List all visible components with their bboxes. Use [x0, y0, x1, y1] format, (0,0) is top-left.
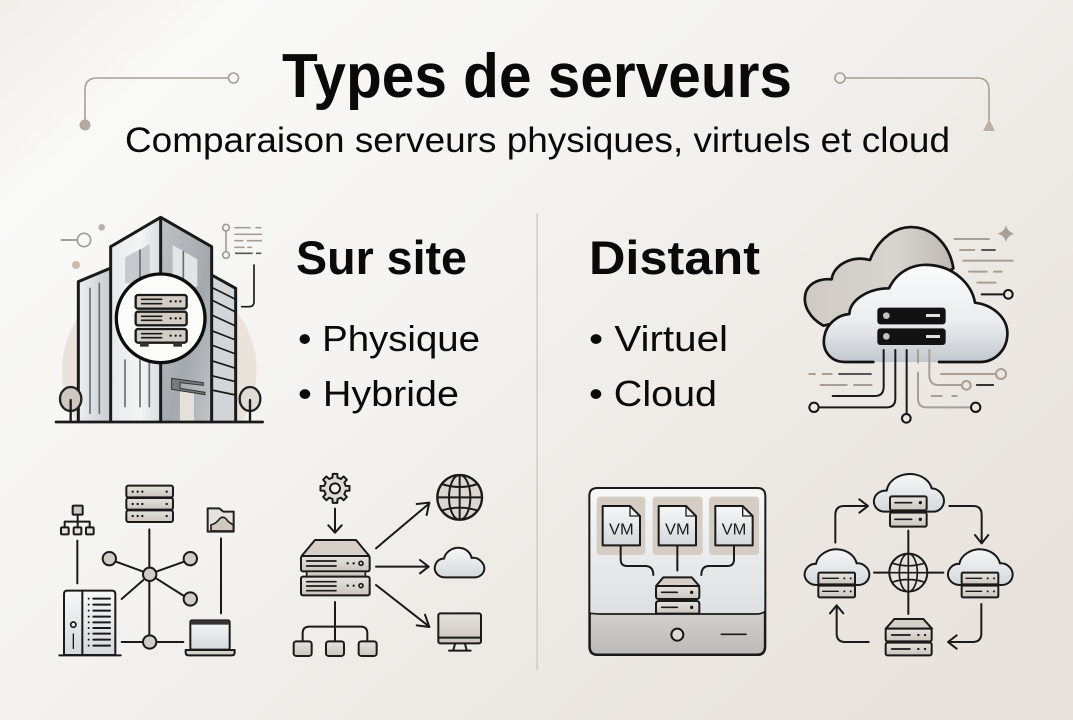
divider [536, 213, 538, 670]
list: Sur site: • Hybride [298, 373, 459, 414]
host server [656, 577, 699, 614]
rack server [126, 486, 173, 522]
server bottom [886, 619, 932, 655]
monitor [438, 613, 481, 651]
VM file 2 [659, 506, 696, 545]
folder [208, 508, 234, 532]
VM file 2: VM [665, 521, 690, 538]
list: Sur site [298, 318, 480, 414]
title: Types de serveurs [282, 42, 792, 111]
globe [437, 475, 482, 520]
VM file 3: VM [722, 521, 746, 538]
list: Distant [589, 318, 728, 414]
gear [320, 474, 349, 503]
list: Distant: • Cloud [589, 373, 717, 414]
tower server [59, 591, 121, 655]
central server [301, 540, 370, 595]
cloud [435, 548, 484, 577]
icon: cloud server mesh [805, 474, 1013, 655]
title connector left [80, 73, 238, 130]
list: Distant: • Virtuel [589, 318, 728, 359]
cloud server right [948, 549, 1013, 597]
title connector right [835, 73, 995, 131]
icon: office building with server [56, 217, 263, 422]
globe center [889, 554, 927, 592]
VM file 1: VM [609, 521, 634, 538]
icon: cloud with server [805, 225, 1014, 423]
icon: virtual machines host [589, 488, 765, 655]
subtitle: Comparaison serveurs physiques, virtuels et cloud [125, 121, 950, 160]
heading: Sur site: Sur site [296, 231, 467, 284]
VM file 1 [603, 506, 640, 545]
icon: physical server network [59, 486, 235, 655]
hierarchy [61, 506, 94, 534]
icon: hybrid server distribution [294, 474, 484, 656]
laptop [186, 620, 235, 655]
list: Sur site: • Physique [298, 318, 480, 359]
heading: Distant: Distant [589, 231, 760, 284]
cloud server top [874, 474, 944, 527]
cloud server left [805, 549, 869, 597]
VM file 3 [715, 506, 753, 545]
